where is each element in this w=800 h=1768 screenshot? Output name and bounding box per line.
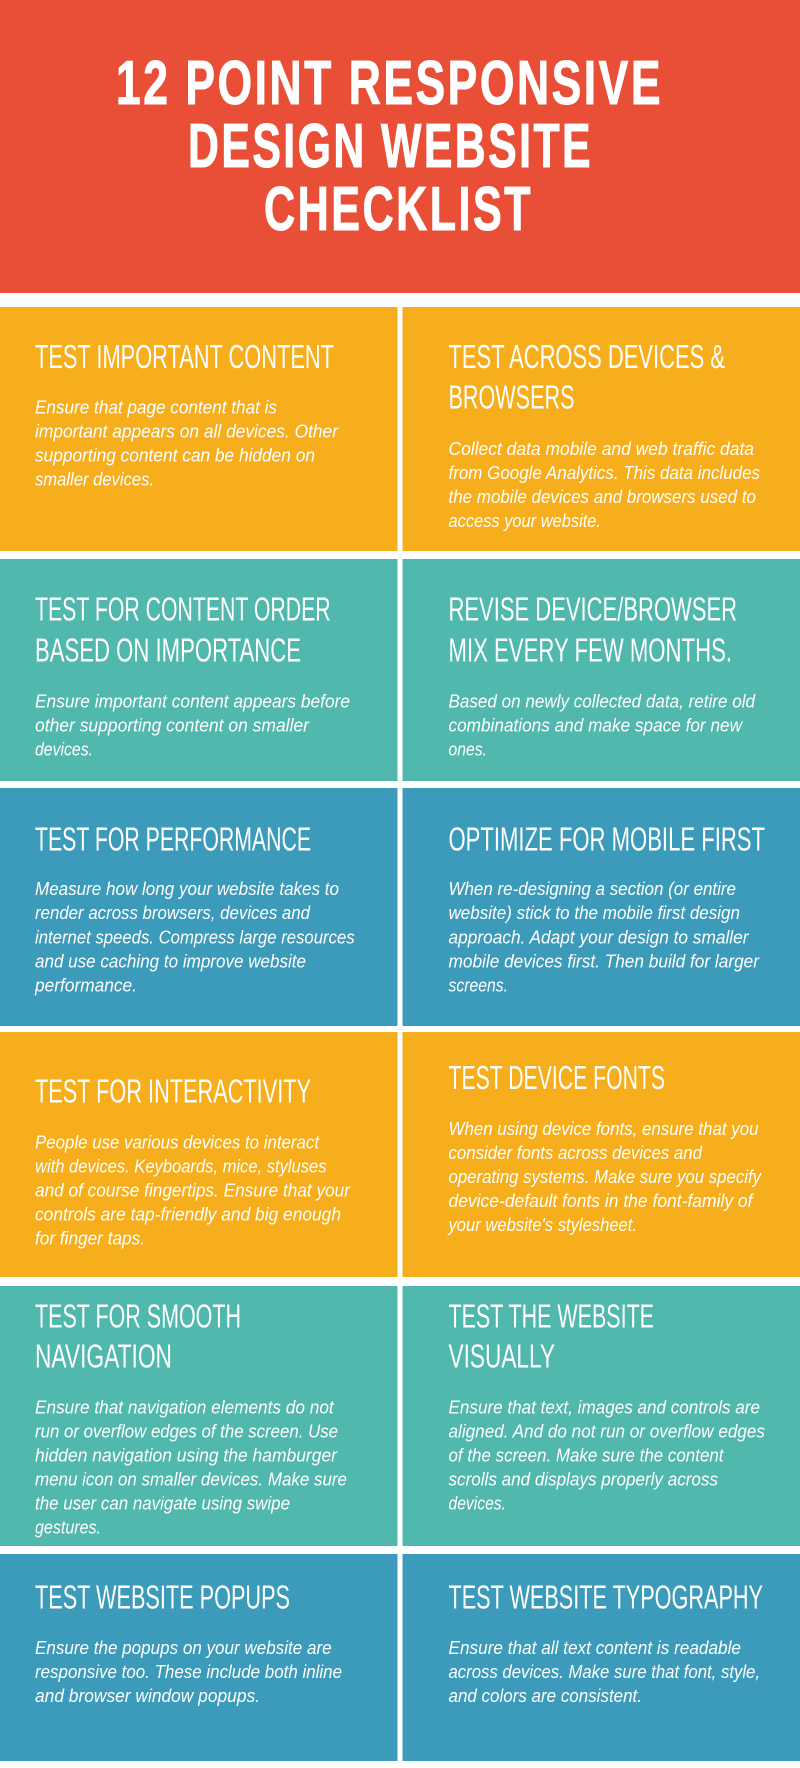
body text: performance. xyxy=(34,974,137,995)
body text: Ensure that navigation elements do not xyxy=(35,1396,334,1417)
heading: BROWSERS xyxy=(448,380,574,417)
body text: website) stick to the mobile first design xyxy=(448,902,740,923)
body text: ones. xyxy=(448,738,487,759)
body text: responsive too. These include both inline xyxy=(35,1661,342,1682)
body text xyxy=(448,1637,760,1706)
panel: test for interactivity xyxy=(0,1032,398,1277)
panel: test website popups xyxy=(0,1554,398,1761)
body text xyxy=(447,1118,763,1235)
body text xyxy=(34,878,355,995)
heading: NAVIGATION xyxy=(35,1339,172,1376)
body text: supporting content can be hidden on xyxy=(35,444,315,465)
body text: render across browsers, devices and xyxy=(35,902,311,923)
body text: internet speeds. Compress large resources xyxy=(35,926,355,947)
panel: test for performance xyxy=(0,788,398,1026)
body text: for finger taps. xyxy=(35,1227,145,1248)
panel: test important content xyxy=(0,307,398,551)
body text: smaller devices. xyxy=(35,468,154,489)
heading: TEST FOR PERFORMANCE xyxy=(35,822,311,859)
body text: controls are tap-friendly and big enough xyxy=(35,1203,341,1224)
title xyxy=(116,49,663,244)
body text xyxy=(448,1396,765,1513)
body text: from Google Analytics. This data includes xyxy=(448,462,760,483)
title: DESIGN WEBSITE xyxy=(188,112,593,181)
body text: the user can navigate using swipe xyxy=(35,1492,290,1513)
body text: Ensure important content appears before xyxy=(35,690,350,711)
body text: When using device fonts, ensure that you xyxy=(448,1118,758,1139)
body text: Ensure the popups on your website are xyxy=(35,1637,332,1658)
heading: TEST FOR INTERACTIVITY xyxy=(35,1074,311,1111)
panel: test the website visually xyxy=(402,1286,800,1546)
body text: Measure how long your website takes to xyxy=(35,878,339,899)
body text: across devices. Make sure that font, style, xyxy=(448,1661,760,1682)
body text: combinations and make space for new xyxy=(448,714,743,735)
body text: device-default fonts in the font-family of xyxy=(448,1190,754,1211)
heading: TEST WEBSITE POPUPS xyxy=(35,1580,290,1617)
body text xyxy=(448,438,760,531)
body text: When re-designing a section (or entire xyxy=(448,878,736,899)
body text xyxy=(35,1637,342,1706)
heading: TEST THE WEBSITE xyxy=(448,1298,654,1335)
body text: run or overflow edges of the screen. Use xyxy=(35,1420,338,1441)
body text: aligned. And do not run or overflow edges xyxy=(448,1420,765,1441)
body text: People use various devices to interact xyxy=(35,1131,320,1152)
heading: TEST DEVICE FONTS xyxy=(448,1060,665,1097)
body text xyxy=(35,1131,351,1248)
heading xyxy=(448,1298,654,1376)
panel: test website typography xyxy=(402,1554,800,1761)
body text: with devices. Keyboards, mice, styluses xyxy=(35,1155,326,1176)
body text xyxy=(35,396,339,489)
body text: other supporting content on smaller xyxy=(35,714,310,735)
body text: approach. Adapt your design to smaller xyxy=(448,926,749,947)
body text: devices. xyxy=(448,1492,506,1513)
body text: important appears on all devices. Other xyxy=(35,420,339,441)
body text: Ensure that all text content is readable xyxy=(448,1637,741,1658)
body text: Ensure that page content that is xyxy=(35,396,277,417)
body text: operating systems. Make sure you specify xyxy=(448,1166,763,1187)
body text: and use caching to improve website xyxy=(35,950,306,971)
body text: screens. xyxy=(448,974,508,995)
heading: BASED ON IMPORTANCE xyxy=(35,632,301,669)
body text: and browser window popups. xyxy=(35,1685,260,1706)
title: CHECKLIST xyxy=(264,175,533,244)
heading: VISUALLY xyxy=(448,1339,555,1376)
body text: gestures. xyxy=(35,1516,101,1537)
body text: consider fonts across devices and xyxy=(448,1142,703,1163)
body text: and of course fingertips. Ensure that your xyxy=(35,1179,351,1200)
heading: TEST FOR CONTENT ORDER xyxy=(35,592,331,629)
body text: access your website. xyxy=(448,510,601,531)
body text: Based on newly collected data, retire old xyxy=(448,690,756,711)
body text: scrolls and displays properly across xyxy=(448,1468,718,1489)
body text: Collect data mobile and web traffic data xyxy=(448,438,754,459)
panel: optimize for mobile first xyxy=(402,788,800,1026)
body text xyxy=(448,690,756,759)
body text: menu icon on smaller devices. Make sure xyxy=(35,1468,347,1489)
body text: Ensure that text, images and controls are xyxy=(448,1396,760,1417)
panel: test across devices and browsers xyxy=(402,307,800,551)
heading xyxy=(448,592,737,669)
body text: hidden navigation using the hamburger xyxy=(35,1444,338,1465)
heading xyxy=(35,592,331,669)
heading xyxy=(448,339,725,417)
heading: TEST IMPORTANT CONTENT xyxy=(35,339,334,376)
body text xyxy=(448,878,760,995)
body text: devices. xyxy=(35,738,93,759)
body text xyxy=(35,690,350,759)
heading xyxy=(35,1298,241,1376)
body text: the mobile devices and browsers used to xyxy=(448,486,756,507)
heading: TEST FOR SMOOTH xyxy=(35,1298,241,1335)
body text: your website's stylesheet. xyxy=(447,1214,637,1235)
body text: and colors are consistent. xyxy=(448,1685,642,1706)
panel: test device fonts xyxy=(402,1032,800,1277)
panel: revise device browser mix xyxy=(402,559,800,781)
body text: mobile devices first. Then build for larger xyxy=(448,950,760,971)
body text xyxy=(35,1396,347,1537)
body text: of the screen. Make sure the content xyxy=(448,1444,724,1465)
header panel xyxy=(0,0,800,293)
panel: test for content order xyxy=(0,559,398,781)
panel: test for smooth navigation xyxy=(0,1286,398,1546)
